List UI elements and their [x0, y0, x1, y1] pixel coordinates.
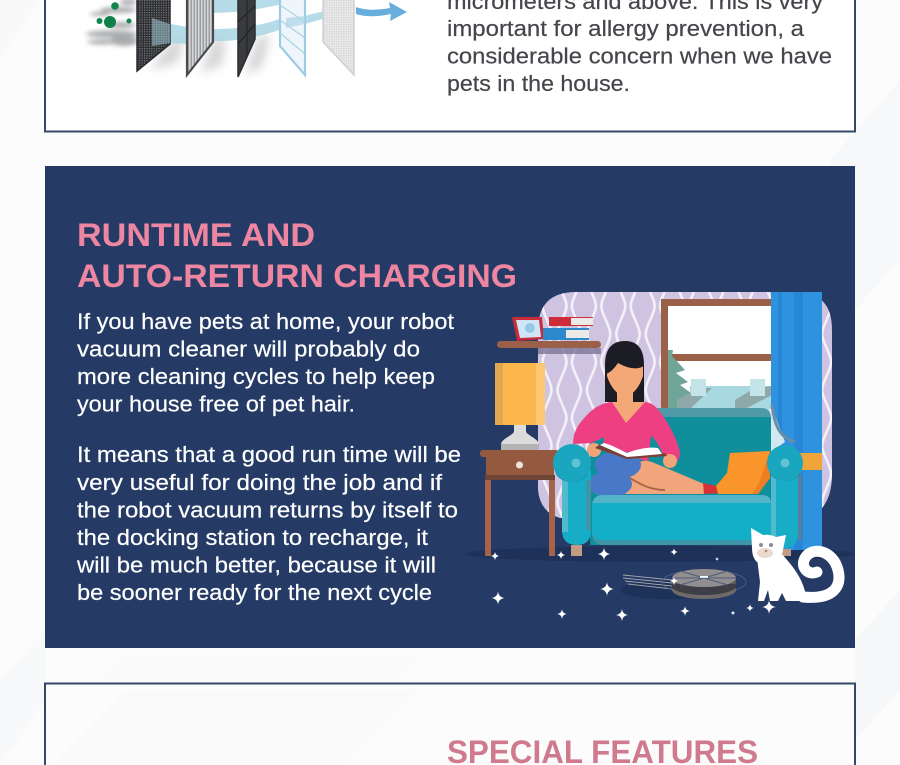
- curtain: [771, 292, 822, 550]
- text: allergy prevention: pets in the house.: [447, 71, 630, 96]
- text: pets mean more cleaning cycles: If you have pets at home, your robot: [77, 309, 454, 334]
- filter layer 3: carbon: [238, 0, 255, 77]
- sofa feet: [571, 545, 791, 556]
- text: run time and recharging: [76, 442, 461, 605]
- sofa back: [590, 408, 771, 545]
- air outflow arrow: [356, 2, 407, 21]
- wall shelf with books and frame: [497, 317, 601, 354]
- text: pets mean more cleaning cycles: more cleaning cycles to help keep: [77, 364, 435, 389]
- picture frame: [512, 317, 544, 341]
- table lamp: [495, 363, 545, 450]
- hands: [587, 443, 601, 457]
- woman reading: [573, 341, 721, 497]
- text: run time and recharging: will be much better, because it will: [76, 552, 436, 578]
- side table: [480, 450, 559, 556]
- floor shadow: [465, 546, 855, 562]
- filter layer 2: pleated: [187, 0, 213, 75]
- window: [661, 299, 772, 409]
- sock: [703, 483, 721, 494]
- neck and face: [607, 362, 643, 398]
- heading: runtime and auto-return charging: AUTO-RETURN CHARGING: [77, 258, 517, 294]
- fringe: [606, 352, 644, 374]
- filter layer 1: dark mesh: [137, 0, 170, 71]
- sweater: [573, 402, 680, 463]
- panel: runtime and auto-return charging: [45, 166, 855, 648]
- leg: [625, 461, 704, 495]
- text: pets mean more cleaning cycles: [77, 309, 454, 416]
- sofa left arm: [553, 444, 591, 545]
- white cat: [751, 528, 839, 601]
- open book: [595, 445, 667, 459]
- heading: runtime and auto-return charging: [77, 217, 517, 294]
- panel frame: [45, 684, 855, 765]
- panel: special features: [45, 684, 855, 765]
- sparkles: [491, 548, 776, 621]
- text: run time and recharging: It means that a good run time will be: [77, 442, 461, 467]
- sofa right arm: [767, 445, 803, 548]
- filter layer 5: fine white mesh: [323, 0, 354, 75]
- stacked books: [549, 317, 593, 326]
- heading: runtime and auto-return charging: RUNTIME AND: [77, 217, 315, 253]
- text: run time and recharging: the docking station to recharge, it: [77, 525, 428, 550]
- text: allergy prevention: [447, 0, 832, 96]
- orange cushion: [716, 451, 770, 494]
- text: run time and recharging: the robot vacuum returns by itself to: [77, 498, 458, 522]
- wallpaper: [538, 292, 832, 522]
- blue knees: [595, 451, 641, 479]
- filter layer 4: blue frame: [280, 0, 305, 75]
- smoke and dust particles: [86, 0, 138, 46]
- text: run time and recharging: very useful for doing the job and if: [77, 470, 443, 495]
- panel frame: [45, 0, 855, 132]
- illustration: woman reading on sofa with robot vacuum and cat: [465, 292, 855, 621]
- hair back: [605, 341, 644, 402]
- filter shadows: [150, 35, 270, 76]
- text: pets mean more cleaning cycles: your house free of pet hair.: [77, 392, 355, 416]
- airflow ribbons: [170, 0, 343, 44]
- text: pets mean more cleaning cycles: vacuum cleaner will probably do: [77, 336, 420, 362]
- panel sheen: [50, 690, 420, 765]
- illustration: multi-layer air filter: [86, 0, 407, 77]
- sofa seat: [592, 495, 771, 545]
- text: allergy prevention: important for allergy prevention, a: [447, 16, 805, 41]
- text: allergy prevention: considerable concern when we have: [447, 44, 832, 68]
- text: run time and recharging: be sooner ready for the next cycle: [77, 580, 432, 605]
- panel: air filtration: [45, 0, 855, 132]
- robot vacuum: [620, 569, 746, 599]
- panel background: [45, 166, 855, 648]
